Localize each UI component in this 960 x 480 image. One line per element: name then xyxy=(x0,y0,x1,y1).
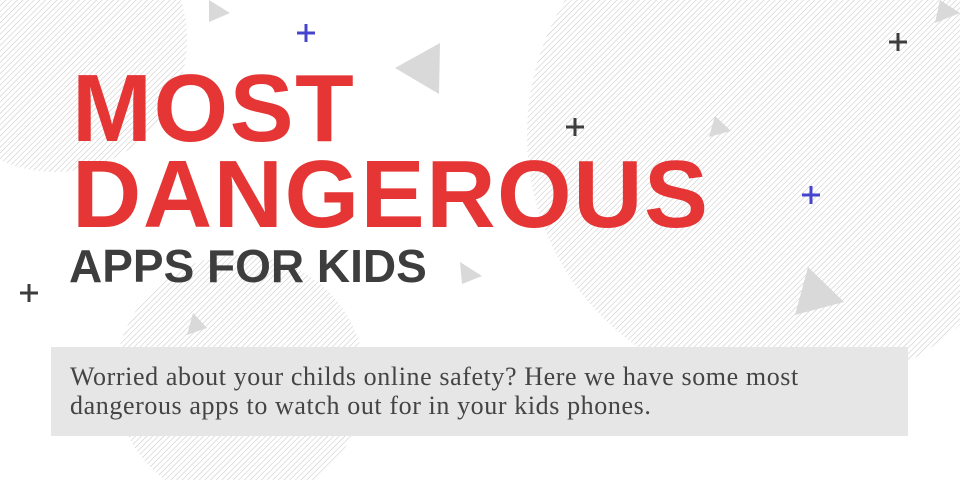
description box xyxy=(51,347,908,436)
description text xyxy=(70,362,799,420)
icon: plus blue xyxy=(802,186,820,204)
description text: dangerous apps to watch out for in your kids phones. xyxy=(70,391,651,420)
subtitle: APPS FOR KIDS xyxy=(69,240,427,292)
title: MOST: MOST xyxy=(72,55,355,162)
description text: Worried about your childs online safety? Here we have some most xyxy=(70,362,799,391)
icon: plus dark xyxy=(20,284,38,302)
icon: plus blue xyxy=(297,24,315,42)
icon: plus dark xyxy=(566,118,584,136)
title: DANGEROUS: DANGEROUS xyxy=(72,141,710,248)
icon: plus dark xyxy=(889,33,907,51)
